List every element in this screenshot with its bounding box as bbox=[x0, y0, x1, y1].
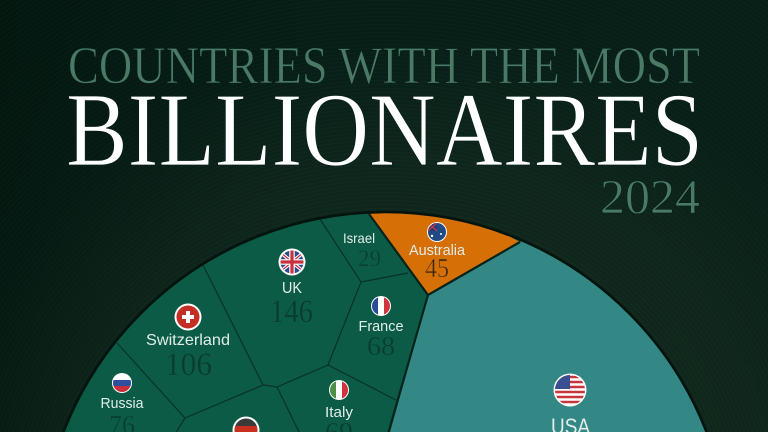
cell: Switzerland: Switzerland bbox=[146, 332, 230, 349]
cell: Israel bbox=[343, 230, 381, 271]
cell: UK: UK bbox=[282, 280, 302, 297]
cell: Australia: 45 bbox=[425, 253, 449, 283]
cell: Israel: Israel bbox=[343, 230, 375, 246]
chart cells bbox=[65, 213, 706, 432]
voronoi chart: billionaires by country bbox=[62, 210, 708, 432]
cell: Germany bbox=[232, 416, 260, 432]
cell: Australia bbox=[409, 222, 465, 277]
cell: Switzerland: 106 bbox=[165, 347, 212, 383]
cell: France bbox=[360, 296, 403, 355]
cell: Russia: Russia bbox=[100, 396, 144, 412]
cell: Australia: Australia bbox=[409, 243, 466, 259]
cell: USA bbox=[551, 374, 590, 432]
cell: UK bbox=[272, 248, 312, 322]
cell: Italy bbox=[325, 380, 354, 432]
cell: Switzerland bbox=[146, 304, 230, 383]
title: billionaires: BILLIONAIRES bbox=[66, 71, 703, 188]
chart outline bbox=[40, 212, 730, 432]
cell: France: France bbox=[358, 319, 404, 335]
title: year: 2024 bbox=[600, 169, 700, 224]
cell: France: 68 bbox=[367, 331, 395, 361]
cell: Israel: 29 bbox=[358, 246, 381, 271]
cell: Italy: Italy bbox=[325, 405, 354, 421]
cell: Russia bbox=[100, 373, 144, 432]
cell: UK: 146 bbox=[270, 294, 313, 330]
